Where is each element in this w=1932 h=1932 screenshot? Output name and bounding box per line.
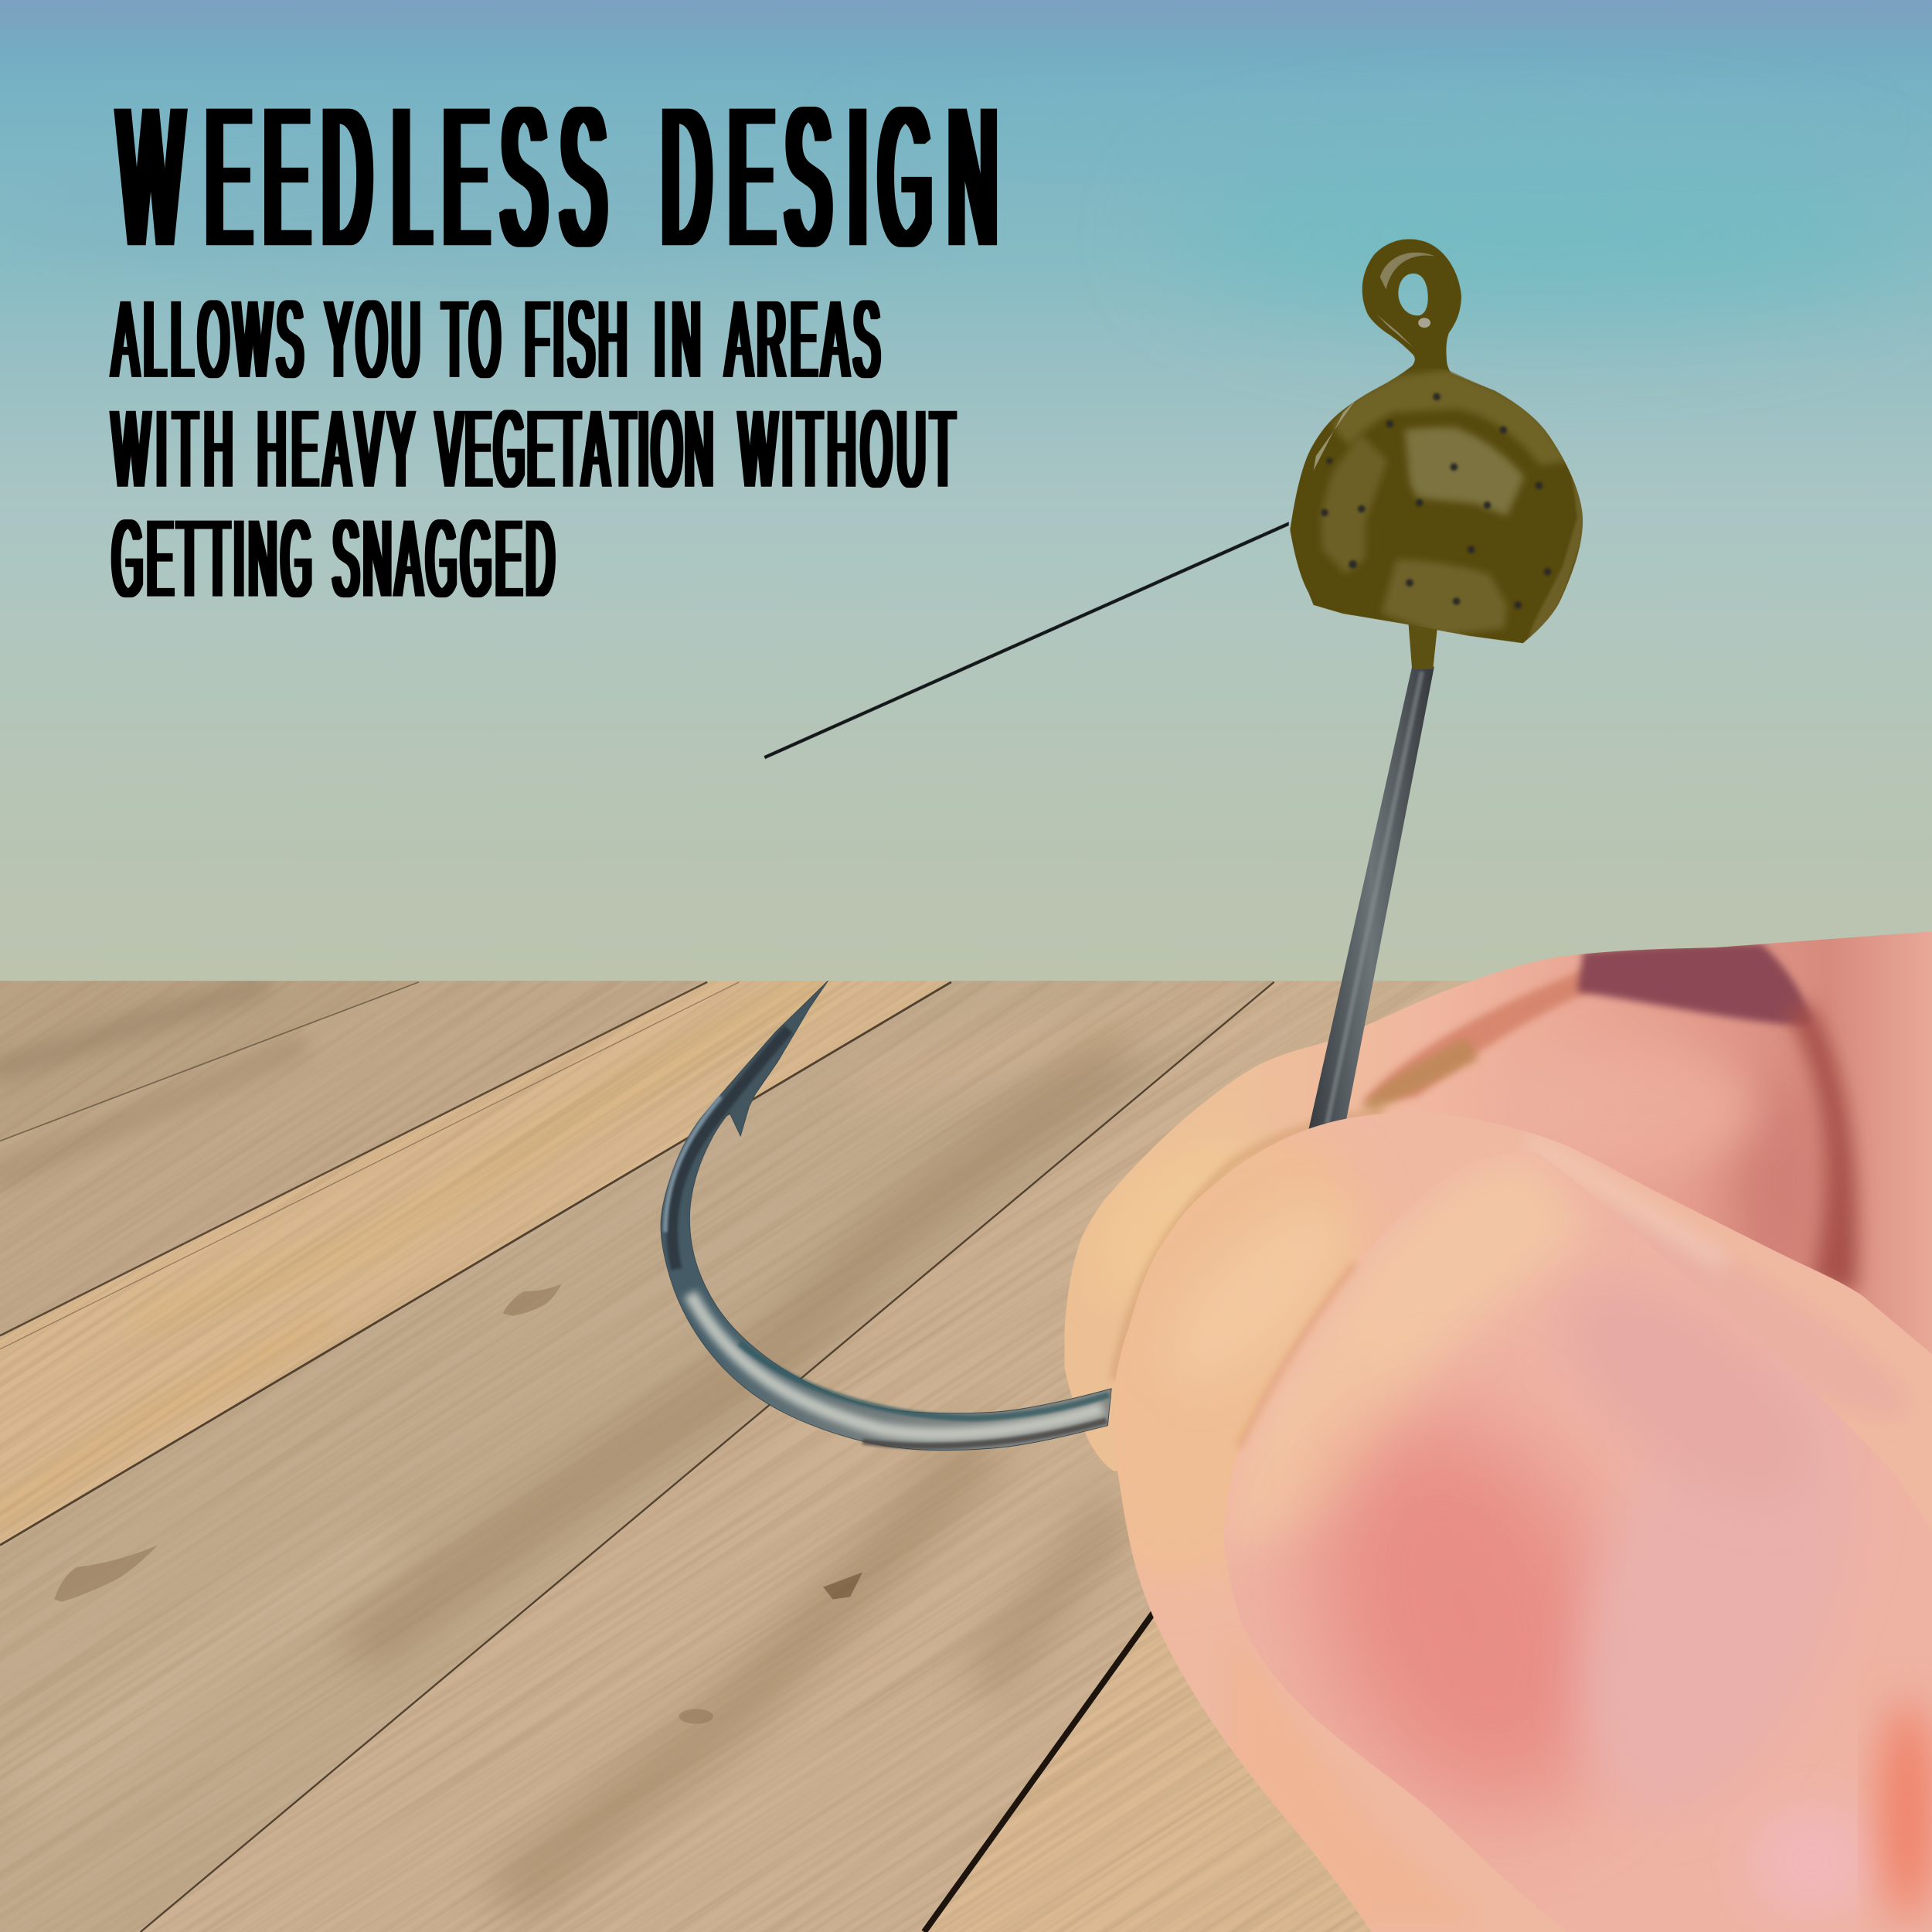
hook upper teal edge [740,1343,1109,1418]
wood tone streaks [0,986,1232,1890]
description text: AREAS [726,277,885,400]
nail pink centre [1264,1375,1669,1854]
jig head light patches [1314,369,1590,653]
plank: golden [0,981,951,1545]
description text: FISH [525,277,631,400]
thumb skin base [1097,1097,1932,1932]
description text: YOU [325,277,424,400]
nail lavender area [1529,1329,1909,1849]
plank: bottom corner [924,1613,1417,1932]
jig head eyelet and body silhouette [1290,239,1583,643]
crease shadow under thumb [1114,1111,1383,1380]
wooden deck [0,981,1471,1932]
description text: SNAGGED [332,497,558,620]
description text: TO [442,277,503,400]
title: WEEDLESS DESIGN [119,65,997,287]
jig head [1290,239,1590,653]
wood knots [54,1284,862,1724]
description text: HEAVY [257,387,420,510]
shadow at top of finger [1577,943,1811,1026]
eyelet highlights [1380,253,1435,290]
hook bend and point [661,981,1111,1451]
cuticle highlights [1528,1140,1725,1263]
hook dark upper bend [672,1029,788,1269]
nail fold redness [1362,968,1602,1103]
plank seams [0,982,1274,1932]
description text: GETTING [112,497,315,620]
nail lower glow [1750,1805,1872,1916]
description text: WITH [112,387,239,510]
hook [661,622,1438,1451]
thumb [1012,1089,1932,1932]
hook lower dark edge [862,1420,1107,1446]
fingertip highlight [1063,1105,1303,1335]
olive collar [1408,622,1438,669]
hook shine [690,1294,1103,1434]
jig head shine streak [1314,400,1355,471]
deep crease shadow [1787,1004,1857,1294]
description text: IN [655,277,707,400]
plank: wide centre [0,981,1274,1932]
cuticle line [1238,1263,1355,1447]
wood grain texture [0,981,1932,1932]
nail peach tip [1219,1152,1590,1553]
description text: ALLOWS [112,277,308,400]
description text: WITHOUT [740,387,960,510]
hook shank wire [1308,622,1438,1130]
index finger [1060,924,1932,1478]
plank: second [0,981,707,1335]
plank: lower right [141,981,1540,1932]
plank: top-left corner [0,981,419,1141]
description text [112,277,960,620]
thumb tip red right corner [1883,1700,1932,1922]
background: blurred sea and sky [0,0,1932,982]
thumbnail [1207,1134,1932,1932]
description text: VEGETATION [436,387,716,510]
jig head speckles [1321,393,1551,609]
wire weed guard [764,522,1289,759]
